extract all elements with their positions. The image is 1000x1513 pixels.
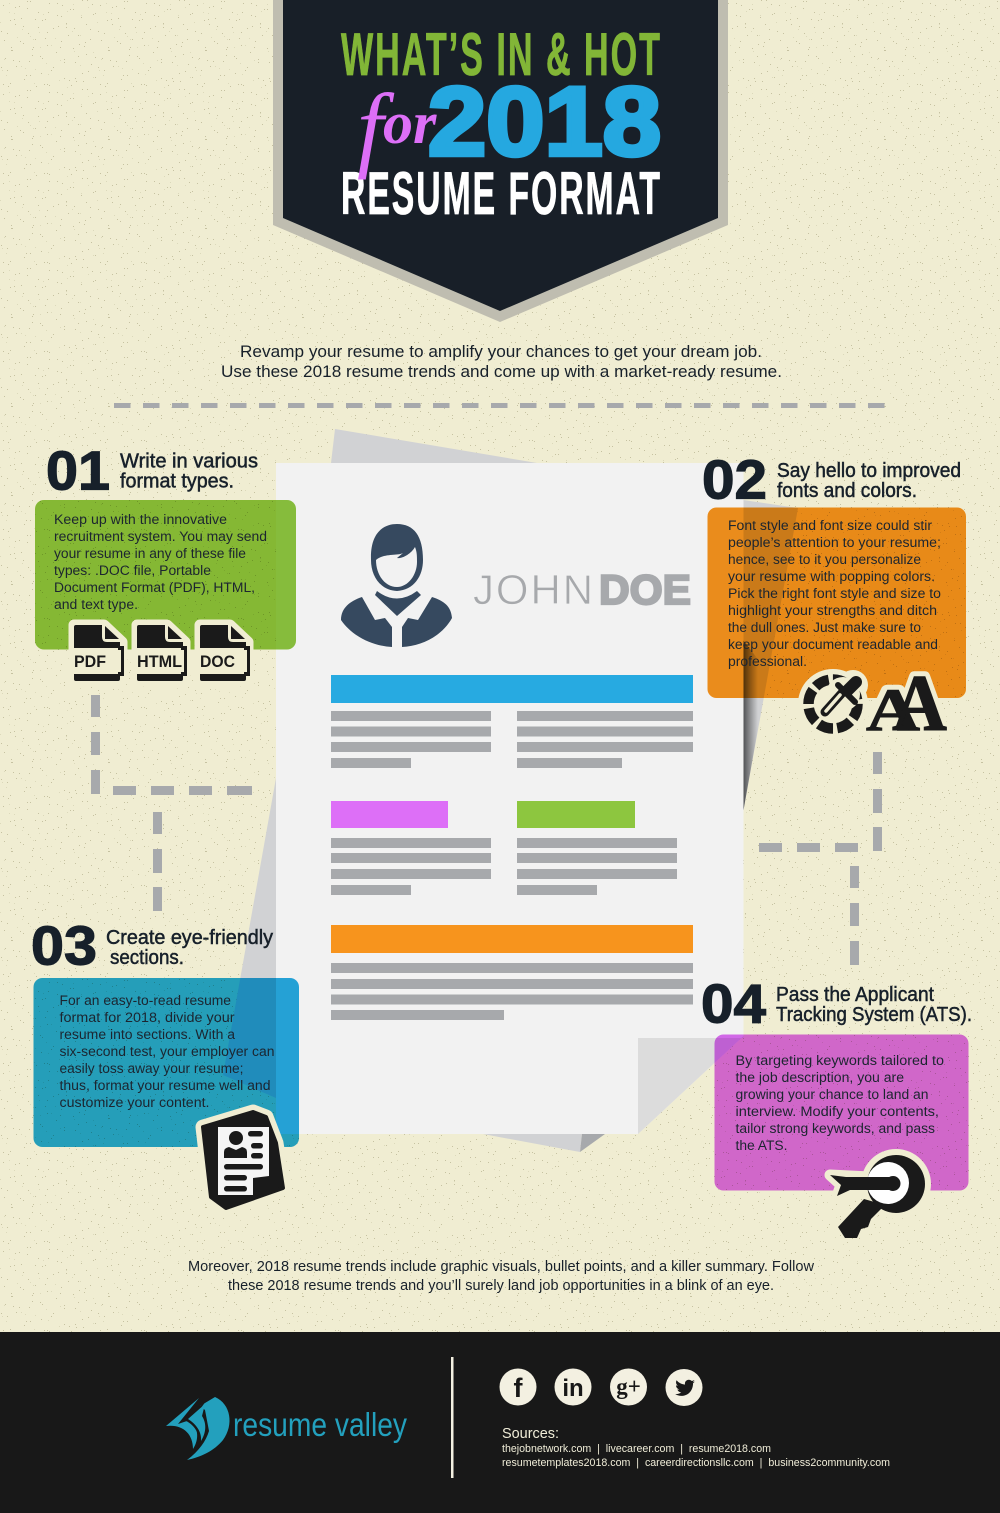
icon: serif AA: A xyxy=(892,658,947,748)
heading 02: fonts and colors. xyxy=(777,479,917,502)
heading 04: Tracking System (ATS). xyxy=(776,1003,972,1026)
icon: HTML file xyxy=(137,625,187,681)
icon: serif AA xyxy=(866,658,947,748)
heading 04: Pass the Applicant xyxy=(776,983,934,1006)
heading 03 xyxy=(106,926,274,969)
icon: PDF file xyxy=(74,625,124,681)
heading 04 xyxy=(776,983,972,1026)
name: John Doe: JOHN xyxy=(473,566,595,613)
resume section 2 xyxy=(331,801,677,895)
panel: step 04 xyxy=(701,972,972,1238)
icon: facebook xyxy=(500,1368,536,1406)
icon: person avatar xyxy=(341,524,452,647)
dashed divider xyxy=(114,403,886,408)
purple box xyxy=(714,1034,968,1190)
name: John Doe: DOE xyxy=(599,566,691,613)
closing text: Moreover, 2018 resume trends include graphic visuals, bullet points, and a killer summary. Follow xyxy=(188,1258,814,1275)
resume section 1 xyxy=(331,675,693,768)
footer divider xyxy=(451,1357,454,1478)
title line: what's in and hot: WHAT’S IN & HOT xyxy=(341,21,662,88)
body text 03: resume into sections. With a xyxy=(60,1027,235,1043)
name: John Doe xyxy=(473,566,691,613)
body text 02: keep your document readable and xyxy=(728,637,938,653)
blue box xyxy=(34,978,299,1147)
closing text xyxy=(188,1258,814,1294)
resume section 3 xyxy=(331,925,693,1020)
title word: for: f xyxy=(357,74,395,180)
dashed connector: step 2 to 4 xyxy=(759,752,882,965)
body text 02: hence, see to it you personalize xyxy=(728,552,921,568)
heading 01: format types. xyxy=(120,470,234,492)
heading 02: Say hello to improved xyxy=(777,459,961,482)
body text 03: easily toss away your resume; xyxy=(60,1061,244,1077)
icon: resume pages xyxy=(203,1112,283,1208)
body text 02: highlight your strengths and ditch xyxy=(728,603,937,619)
logo: resume valley mark xyxy=(166,1397,230,1460)
icon: color dial and dropper xyxy=(798,669,868,739)
orange box xyxy=(708,508,966,698)
icon: key xyxy=(830,1149,931,1238)
body text 04: growing your chance to land an xyxy=(736,1087,928,1103)
heading 02 xyxy=(777,459,961,502)
panel: step 02 xyxy=(702,448,966,748)
green box xyxy=(35,500,296,650)
icon: google plus: g+ xyxy=(616,1374,641,1399)
icon: DOC file: DOC xyxy=(200,652,235,671)
icon: facebook: f xyxy=(514,1373,524,1403)
icon: PDF file: PDF xyxy=(74,652,106,671)
sources: resumetemplates2018.com | careerdirectionsllc.com | business2community.com xyxy=(502,1457,890,1469)
number 02: 02 xyxy=(702,448,767,510)
title banner xyxy=(273,0,728,322)
body text 03: format for 2018, divide your xyxy=(60,1010,235,1026)
icon: google plus xyxy=(610,1368,647,1406)
intro text: Revamp your resume to amplify your chances to get your dream job. xyxy=(240,342,762,361)
intro text xyxy=(221,342,782,381)
title line: resume format: RESUME FORMAT xyxy=(341,160,662,227)
body text 02 xyxy=(728,518,941,670)
body text 04: the job description, you are xyxy=(736,1070,904,1086)
body text 02: Font style and font size could stir xyxy=(728,518,932,534)
number 03: 03 xyxy=(31,914,97,976)
sources xyxy=(502,1425,890,1469)
panel: step 01 xyxy=(35,440,296,681)
body text 01: recruitment system. You may send xyxy=(54,529,267,545)
heading 03: sections. xyxy=(110,946,184,969)
resume back sheets xyxy=(223,429,798,1152)
heading 01 xyxy=(120,450,258,492)
body text 04: By targeting keywords tailored to xyxy=(736,1053,944,1069)
body text 03 xyxy=(60,993,274,1111)
panel: step 03 xyxy=(31,914,299,1208)
icon: serif AA: A xyxy=(892,658,947,748)
closing text: these 2018 resume trends and you’ll surely land job opportunities in a blink of an eye. xyxy=(228,1277,774,1294)
icon: linkedin xyxy=(554,1368,592,1406)
body text 04: tailor strong keywords, and pass xyxy=(736,1121,935,1137)
body text 04: interview. Modify your contents, xyxy=(736,1104,939,1120)
icon: HTML file: HTML xyxy=(137,652,182,671)
sources: thejobnetwork.com | livecareer.com | resume2018.com xyxy=(502,1443,771,1455)
body text 02: the dull ones. Just make sure to xyxy=(728,620,921,636)
body text 01: and text type. xyxy=(54,597,138,613)
body text 02: professional. xyxy=(728,654,807,670)
resume sheet xyxy=(276,463,744,1134)
title year: 2018 xyxy=(428,67,661,176)
title word: for: or xyxy=(383,90,437,156)
body text 04 xyxy=(736,1053,944,1154)
body text 03: customize your content. xyxy=(60,1095,210,1111)
dashed connector: step 1 to 3 xyxy=(91,695,252,911)
body text 01: Keep up with the innovative xyxy=(54,512,227,528)
body text 03: For an easy-to-read resume xyxy=(60,993,231,1009)
icon: linkedin: in xyxy=(562,1375,584,1402)
body text 04: the ATS. xyxy=(736,1138,788,1154)
sources: Sources: xyxy=(502,1425,559,1442)
body text 03: six-second test, your employer can xyxy=(60,1044,274,1060)
body text 01 xyxy=(54,512,267,613)
icon: twitter xyxy=(666,1369,702,1406)
body text 02: your resume with popping colors. xyxy=(728,569,935,585)
intro text: Use these 2018 resume trends and come up with a market-ready resume. xyxy=(221,362,782,381)
body text 02: Pick the right font style and size to xyxy=(728,586,941,602)
body text 03: thus, format your resume well and xyxy=(60,1078,270,1094)
body text 01: your resume in any of these file xyxy=(54,546,246,562)
body text 01: types: .DOC file, Portable xyxy=(54,563,211,579)
logo: resume valley wordmark: resume valley xyxy=(233,1406,407,1443)
body text 01: Document Format (PDF), HTML, xyxy=(54,580,255,596)
footer xyxy=(0,1332,1000,1513)
heading 03: Create eye-friendly xyxy=(106,926,274,949)
heading 01: Write in various xyxy=(120,450,258,472)
icon: serif AA: A xyxy=(866,677,920,743)
icon: DOC file xyxy=(200,625,250,681)
number 01: 01 xyxy=(46,440,110,502)
icon: serif AA: A xyxy=(866,677,920,743)
body text 02: people’s attention to your resume; xyxy=(728,535,941,551)
folded corner xyxy=(638,1036,744,1134)
number 04: 04 xyxy=(701,972,766,1034)
